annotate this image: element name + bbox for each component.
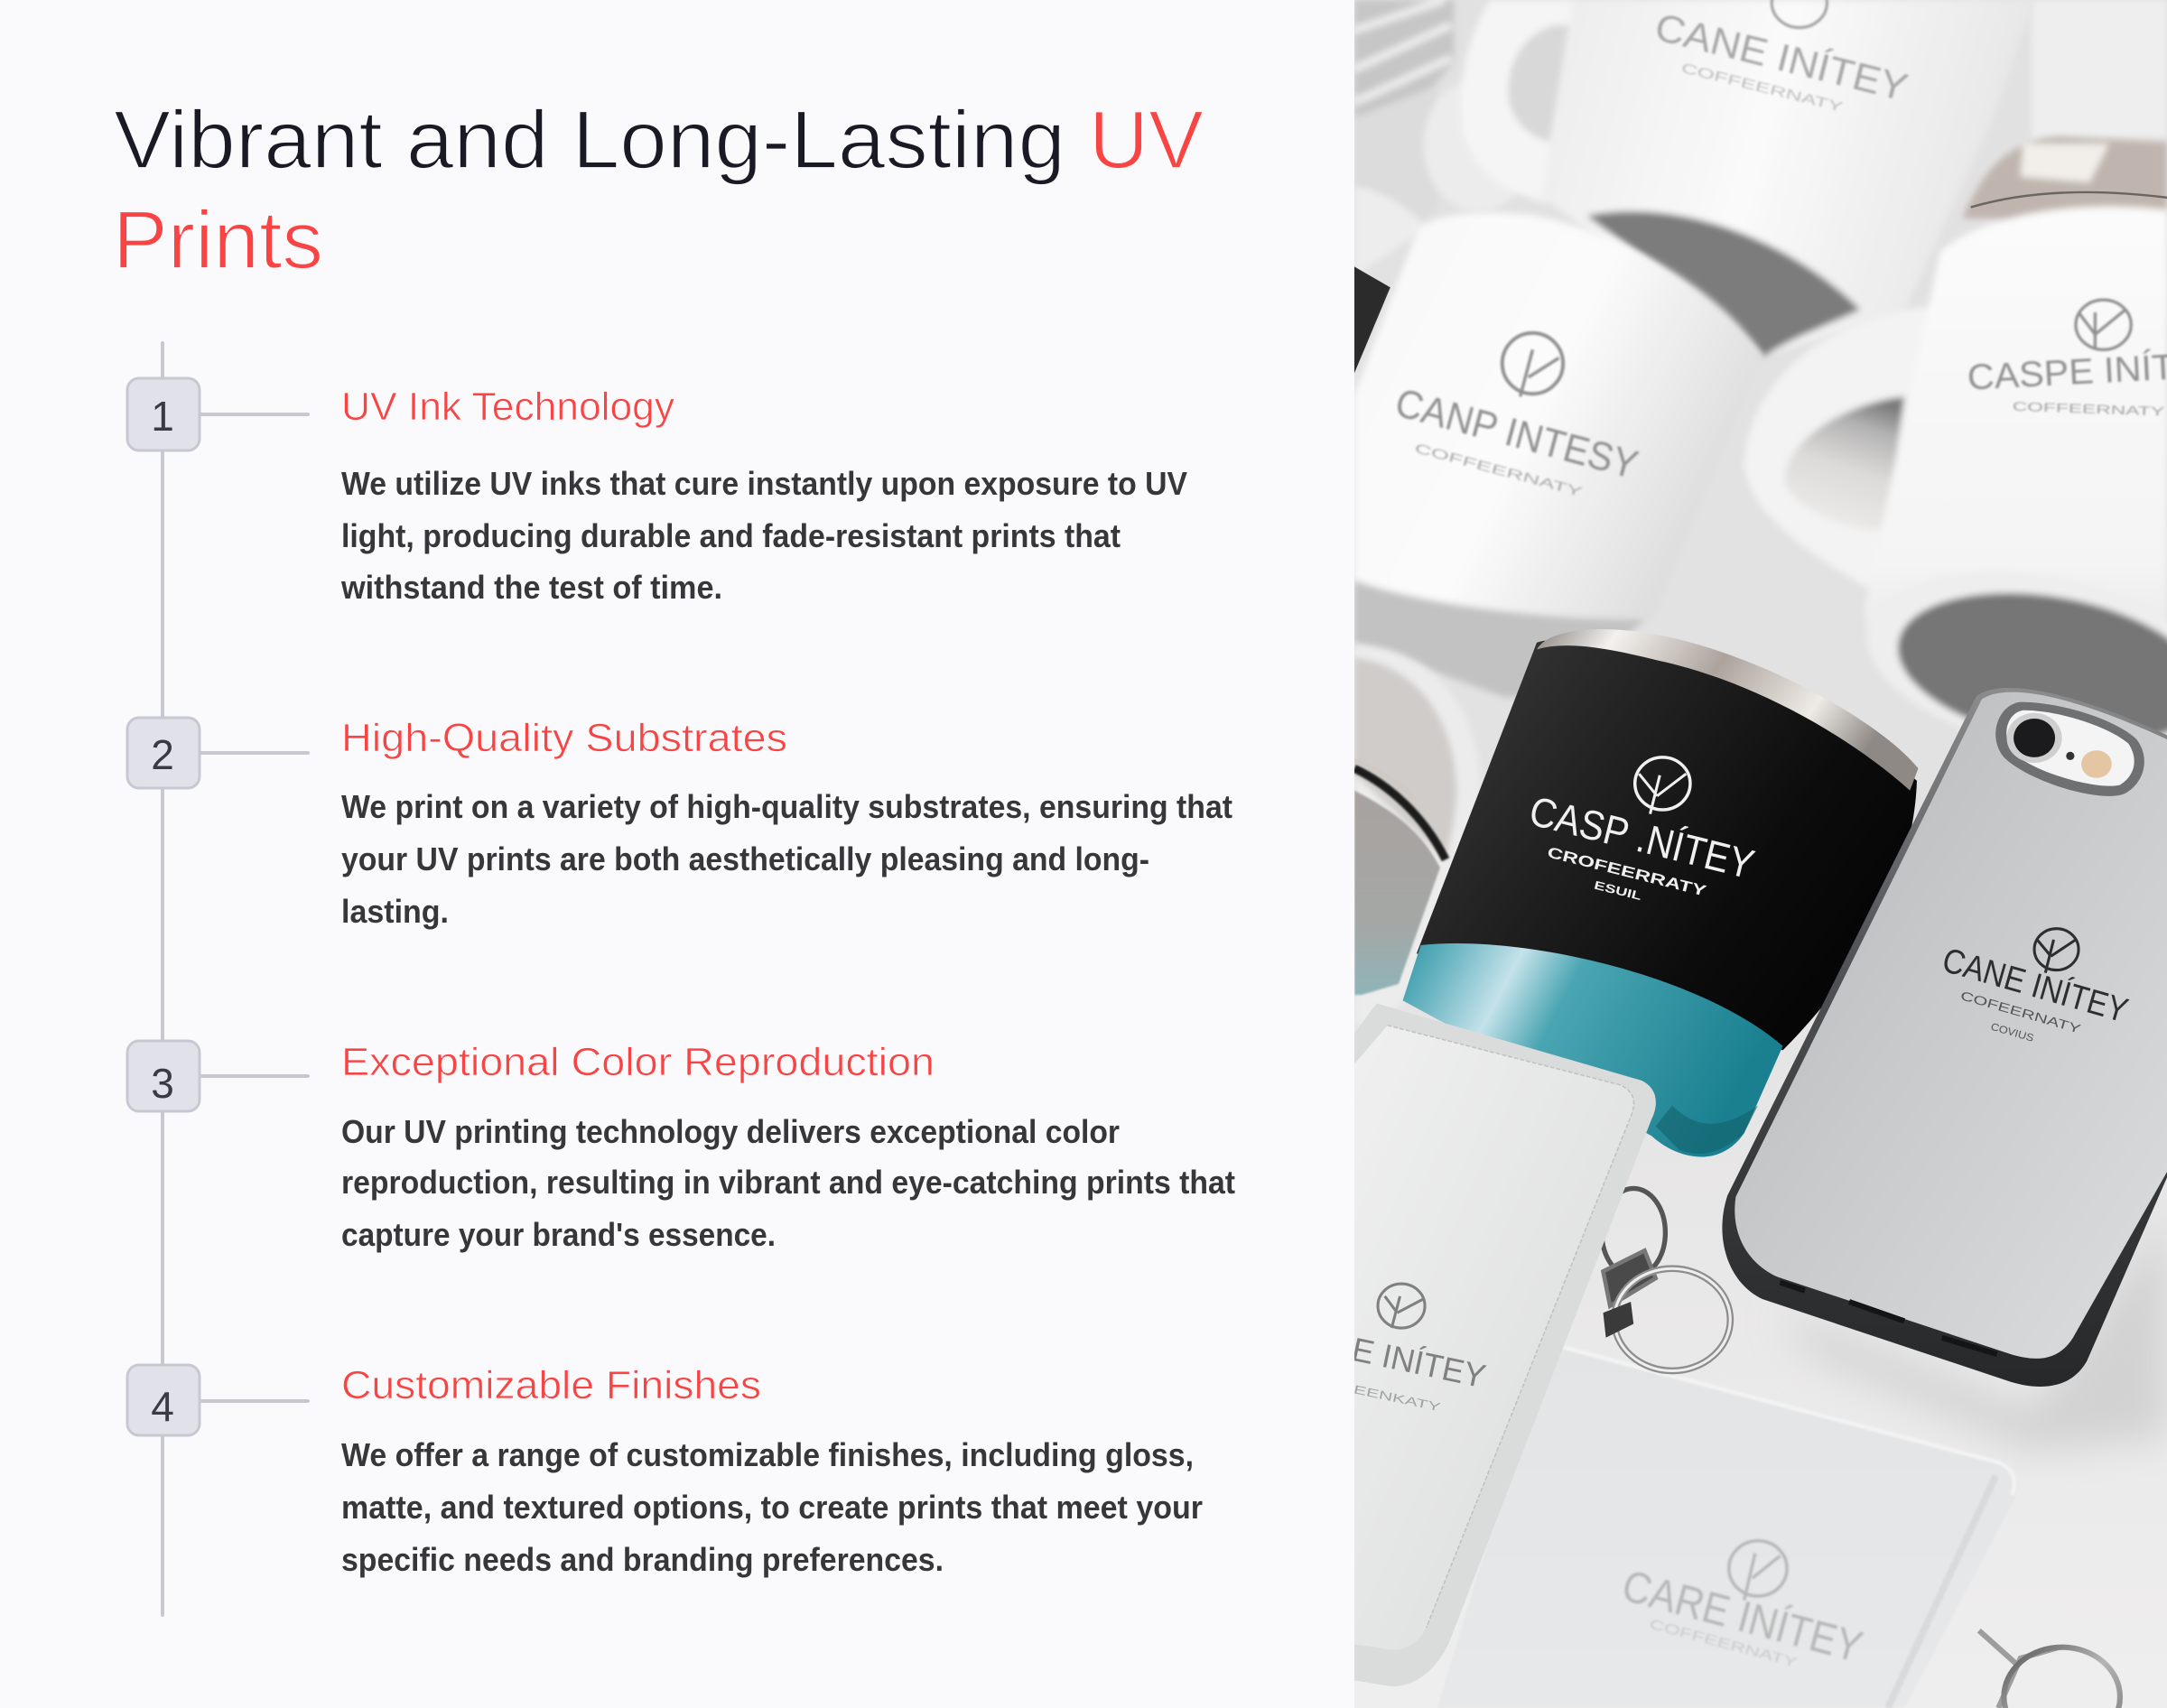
tumbler body (1417, 638, 1917, 1050)
mug opening right (1854, 546, 2167, 775)
mug left logo: CANP INTESY (1390, 381, 1642, 487)
mug: right (1744, 137, 2167, 775)
description 4: matte, and textured options, to create prints that meet your (341, 1489, 1203, 1526)
mug: left (1354, 213, 1762, 698)
description 1: We utilize UV inks that cure instantly upon exposure to UV (341, 465, 1187, 502)
title: Prints (113, 195, 323, 286)
title: Vibrant and Long-Lasting (114, 95, 1065, 186)
step 1 (127, 378, 1187, 606)
left keychain logo: E INÍTEY (1349, 1331, 1489, 1395)
tumbler logo (1525, 757, 1759, 903)
mug: top centre logo: COFFEERNATY (1679, 60, 1845, 116)
keychain: lower leather square (1437, 1343, 2018, 1708)
phone case (1722, 688, 2167, 1387)
bowl left edge (1354, 645, 1480, 1023)
phone logo: COFEERNATY (1959, 989, 2082, 1036)
title: UV (1089, 95, 1204, 186)
title (113, 95, 1204, 286)
number badge 1 (127, 378, 200, 450)
number badge 2 (127, 718, 200, 788)
number badge 1: 1 (151, 393, 174, 440)
description 2: your UV prints are both aesthetically pleasing and long- (341, 840, 1149, 877)
number badge 3 (127, 1041, 200, 1111)
mug: top centre logo: CANE INÍTEY (1651, 5, 1912, 110)
left keychain logo: EENKATY (1353, 1382, 1442, 1414)
tumbler teal base (1403, 943, 1782, 1156)
mug right logo (1967, 300, 2167, 419)
step 4 (127, 1363, 1203, 1578)
mug left logo: COFFEERNATY (1413, 441, 1584, 500)
mug body left (1354, 213, 1762, 619)
tumbler: black with teal base (1403, 629, 1918, 1156)
phone logo: COVIUS (1989, 1022, 2035, 1044)
phone logo: CANE INÍTEY (1938, 941, 2132, 1030)
heading 2: High-Quality Substrates (341, 716, 787, 760)
description 4 (341, 1436, 1203, 1578)
tumbler logo: CASP .NÍTEY (1525, 787, 1759, 888)
lower keychain logo: CARE INÍTEY (1617, 1562, 1867, 1672)
heading 4: Customizable Finishes (341, 1363, 761, 1407)
connector 3 (200, 1074, 310, 1078)
mug shadow band left (1354, 573, 1659, 698)
mug body right (1865, 207, 2167, 719)
description 3: reproduction, resulting in vibrant and eye-catching prints that (341, 1164, 1235, 1201)
description 1 (340, 465, 1187, 606)
mug body top (1541, 0, 2034, 357)
tumbler logo: ESUIL (1593, 878, 1643, 903)
dark object left edge (1354, 266, 1390, 373)
back ring behind mug handle (1424, 79, 1534, 211)
tumbler metal rim (1537, 629, 1918, 791)
timeline vertical line (161, 341, 164, 1617)
mug right logo: CASPE INÍT (1967, 347, 2167, 398)
keychain: left leather tag (1349, 1003, 1656, 1686)
product photo: branded mugs, tumbler, phone case and keychains (1349, 0, 2167, 1708)
description 3: capture your brand's essence. (341, 1216, 776, 1253)
left keychain logo (1349, 1284, 1489, 1414)
connector 2 (200, 751, 310, 755)
description 3 (341, 1113, 1235, 1253)
number badge 2: 2 (151, 731, 174, 778)
description 1: light, producing durable and fade-resistant prints that (341, 517, 1121, 554)
description 2: lasting. (341, 893, 449, 930)
description 4: specific needs and branding preferences. (341, 1541, 944, 1578)
number badge 4 (127, 1365, 200, 1435)
description 3: Our UV printing technology delivers exceptional color (341, 1113, 1120, 1150)
mug right logo: COFFEERNATY (2012, 400, 2164, 419)
mug opening top (1586, 211, 1860, 357)
description 1: withstand the test of time. (340, 569, 722, 606)
description 2: We print on a variety of high-quality substrates, ensuring that (341, 788, 1232, 825)
heading 3: Exceptional Color Reproduction (341, 1040, 935, 1084)
keyrings (1602, 1188, 2120, 1708)
bowl band and lower body (1354, 760, 1446, 995)
mug handle right (1744, 307, 1930, 591)
mug handle top (1461, 0, 1604, 205)
mug left logo (1390, 333, 1642, 500)
fabric top left (1354, 0, 2167, 276)
lower keychain logo: COFFEERNATY (1648, 1617, 1799, 1671)
photo background (1354, 0, 2167, 1708)
number badge 4: 4 (151, 1383, 174, 1430)
camera island (1995, 702, 2144, 796)
phone shadow (1782, 1216, 2167, 1451)
metal rim right (1962, 137, 2167, 221)
phone ports (1780, 1283, 1997, 1354)
mug: top centre (1424, 0, 2034, 357)
description 2 (341, 788, 1232, 930)
metal rim dark line (1971, 192, 2167, 208)
number badge 3: 3 (151, 1060, 174, 1107)
description 4: We offer a range of customizable finishes, including gloss, (341, 1436, 1194, 1473)
step 3 (127, 1040, 1235, 1253)
tumbler logo: CROFEERRATY (1546, 844, 1708, 900)
heading 1: UV Ink Technology (341, 385, 674, 429)
step 2 (127, 716, 1232, 930)
phone frame (1722, 688, 2167, 1387)
phone back (1735, 692, 2167, 1359)
connector 4 (200, 1399, 310, 1403)
connector 1 (200, 413, 310, 416)
